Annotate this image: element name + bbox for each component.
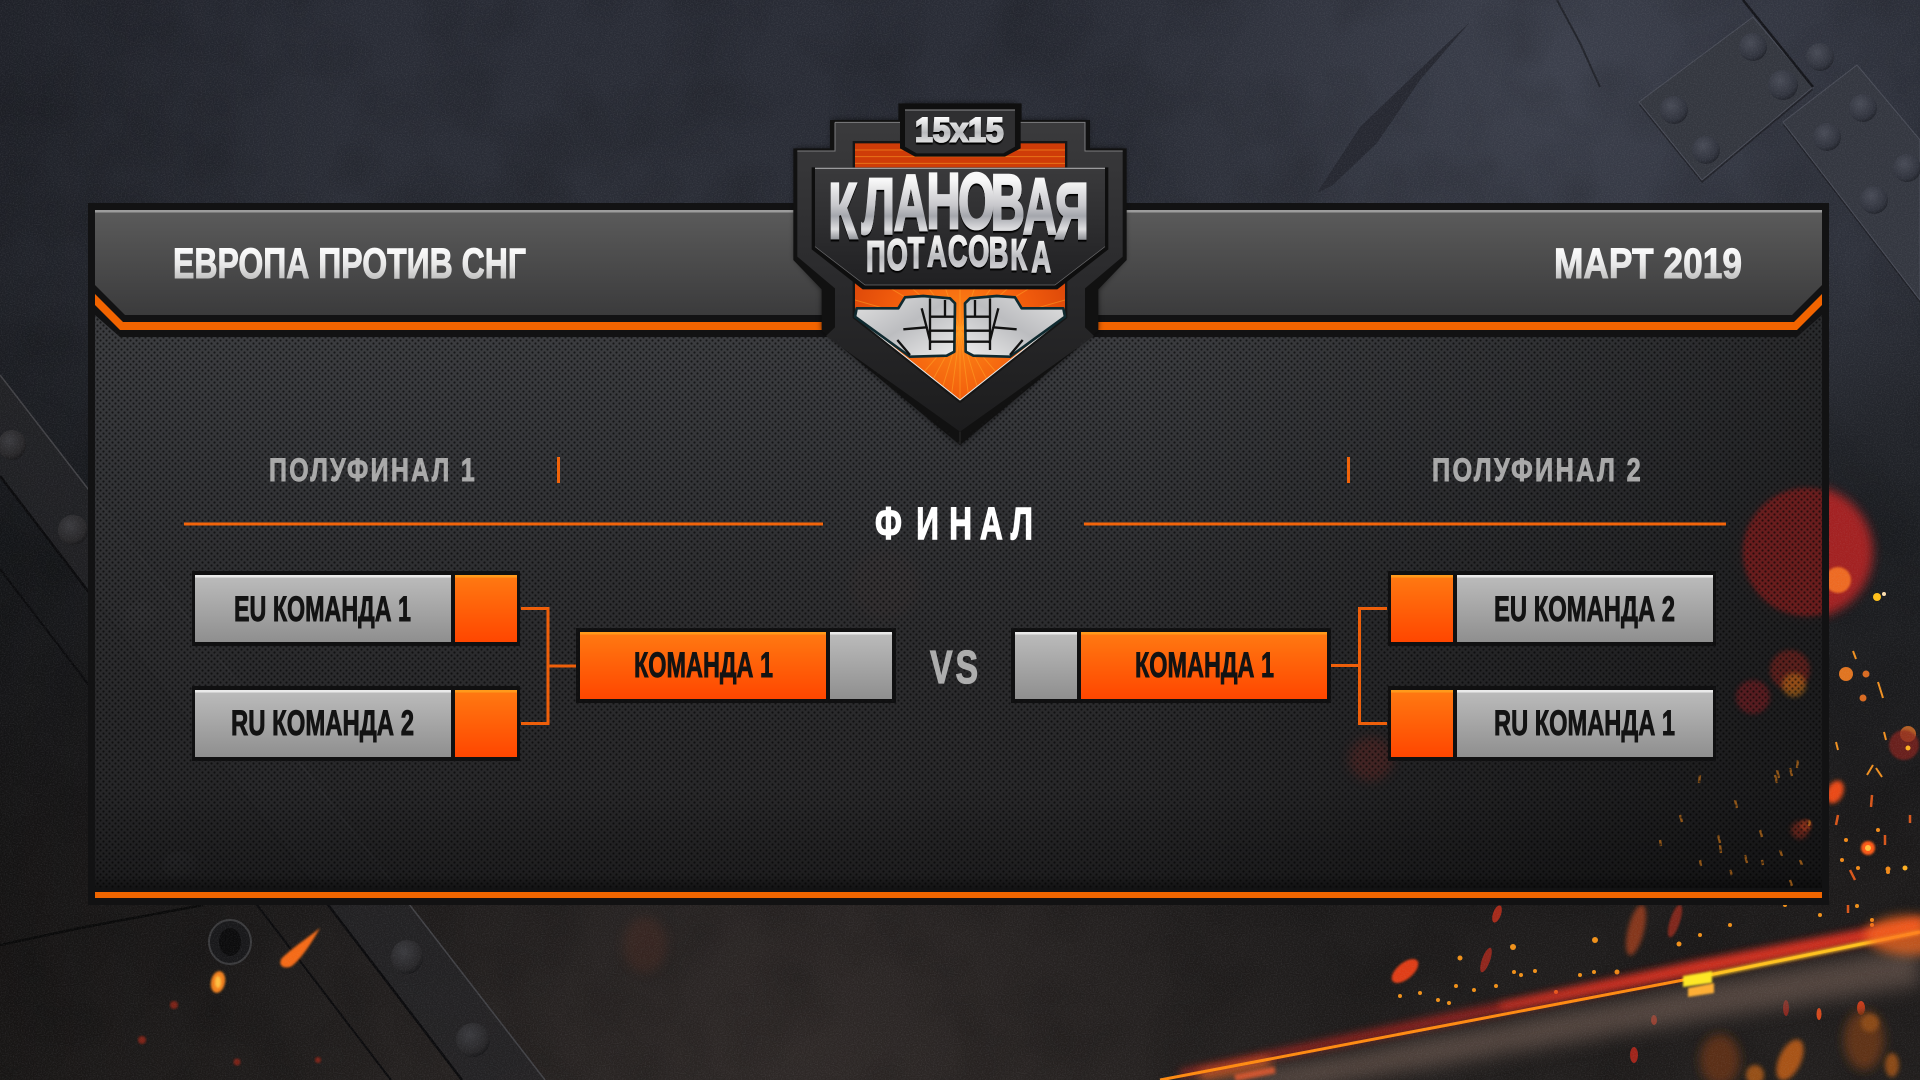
team row: EU team 2: EU КОМАНДА 2 xyxy=(1494,590,1675,629)
team row: EU team 1: EU КОМАНДА 1 xyxy=(234,590,411,629)
sparks lower right xyxy=(1388,903,1899,1080)
final heading xyxy=(184,500,1726,549)
header orange stripe xyxy=(95,294,1822,330)
header right text: МАРТ 2019 xyxy=(1554,240,1742,288)
left fist xyxy=(855,296,955,357)
panel frame xyxy=(88,203,1829,905)
top tab xyxy=(900,104,1021,157)
bracket left connector xyxy=(521,608,576,724)
title: ПОТАСОВКА: ПОТАСОВКА xyxy=(866,226,1051,281)
team row: RU team 2: RU КОМАНДА 2 xyxy=(231,704,414,743)
title: КЛАНОВАЯ: КЛАНОВАЯ xyxy=(828,156,1089,255)
logo: 15x15 clan brawl shield xyxy=(793,103,1127,445)
semifinal 1 label: ПОЛУФИНАЛ 1 xyxy=(269,452,477,488)
team row: EU team 2 xyxy=(1388,571,1716,646)
final team left: КОМАНДА 1 xyxy=(634,646,773,685)
shield outer body xyxy=(793,103,1127,445)
panel body with dot texture xyxy=(95,315,1822,892)
red bokeh glows behind panel xyxy=(851,486,1873,619)
15x15 text: 15x15 xyxy=(915,112,1004,150)
VS label: VS xyxy=(930,641,981,693)
metal plates top right xyxy=(1639,0,1920,303)
right fist xyxy=(965,296,1065,357)
semifinal 2 label: ПОЛУФИНАЛ 2 xyxy=(1432,452,1643,488)
diagonal riveted beam left xyxy=(0,375,545,1080)
final heading: ФИНАЛ xyxy=(875,500,1033,549)
title plate xyxy=(812,167,1108,289)
header bar xyxy=(95,210,1822,315)
team row: RU team 2 xyxy=(192,686,520,761)
bracket right connector xyxy=(1331,608,1387,724)
final team right: КОМАНДА 1 xyxy=(1135,646,1274,685)
team row: RU team 1: RU КОМАНДА 1 xyxy=(1494,704,1675,743)
final team right xyxy=(1011,628,1331,703)
bottom orange stripe xyxy=(95,892,1822,898)
orange window with rays xyxy=(843,141,1077,407)
glows showing through panel xyxy=(1349,488,1871,886)
scratch marks top xyxy=(1317,0,1600,193)
left embers xyxy=(138,917,667,1066)
team row: RU team 1 xyxy=(1388,686,1716,761)
fire streak bottom right xyxy=(1160,915,1920,1080)
main panel xyxy=(88,203,1871,905)
header left text: ЕВРОПА ПРОТИВ СНГ xyxy=(173,240,526,288)
shield drop shadow xyxy=(795,103,1125,445)
team row: EU team 1 xyxy=(192,571,520,646)
panel dot texture xyxy=(95,315,1822,892)
sparks beside panel xyxy=(1823,592,1919,913)
semifinal 2 label xyxy=(1347,452,1643,488)
final team left xyxy=(576,628,896,703)
